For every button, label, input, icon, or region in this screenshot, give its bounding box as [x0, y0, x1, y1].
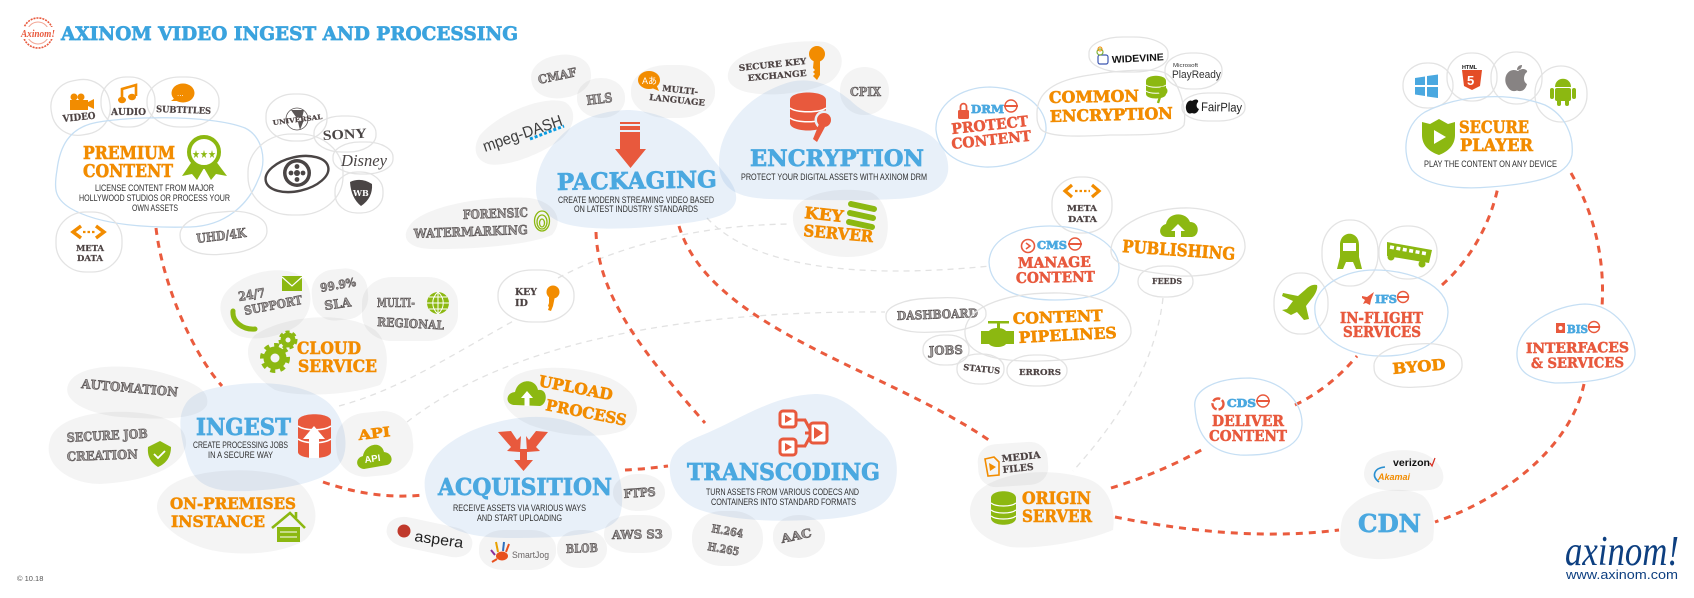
bubble: meta data: [56, 212, 122, 272]
blob: transcoding: [670, 394, 897, 521]
bubble: train: [1322, 220, 1378, 286]
description: acquisition: RECEIVE ASSETS VIA VARIOUS WAYS: [453, 503, 586, 513]
bubble: upload process: UPLOAD: [537, 371, 614, 404]
heading: pipelines: PIPELINES: [1018, 323, 1117, 347]
icon: stamp: [1004, 100, 1018, 112]
bubble: multi-language: MULTI-: [662, 84, 699, 98]
bubble: meta data: DATA: [1068, 215, 1097, 225]
heading: interfaces: INTERFACES: [1526, 340, 1629, 357]
heading: secure: SECURE: [1459, 118, 1529, 138]
bubble: multi-language: [631, 65, 715, 118]
bubble: key server: KEY: [804, 203, 845, 226]
heading: common: COMMON: [1049, 86, 1139, 107]
icon: cms circle: [1022, 240, 1034, 252]
bubble: automation: [67, 366, 207, 419]
description: transcoding: [706, 487, 859, 507]
label: cds: CDS: [1227, 397, 1256, 410]
panel: packaging: [406, 51, 736, 249]
bubble: aac: [773, 515, 825, 558]
bubble: video: [47, 75, 114, 140]
description: packaging: [558, 195, 714, 214]
description: HOLLYWOOD STUDIOS OR PROCESS YOUR: [79, 193, 230, 203]
heading: acquisition: ACQUISITION: [437, 474, 612, 501]
bubble: fairplay: FairPlay: [1201, 100, 1243, 115]
bubble: aws s3: [604, 515, 672, 553]
description: ingest: [193, 440, 288, 460]
bubble: widevine: WIDEVINE: [1112, 52, 1164, 66]
blob: ingest: [180, 383, 346, 491]
blob: origin server: [970, 472, 1114, 548]
icon: small plane: [1362, 292, 1374, 305]
bubble: playready: Microsoft: [1173, 63, 1199, 69]
bubble: multi-regional: MULTI-: [377, 295, 415, 310]
bubble: h.264 h.265: H.264: [710, 522, 745, 541]
url: www.axinom.com: [1565, 567, 1678, 582]
blob: packaging: [536, 110, 736, 229]
bubble: secure key exchange: [728, 41, 842, 94]
outline: secure player: [1406, 97, 1572, 188]
bubble: cmaf: [528, 51, 594, 102]
heading: in-flight: IN-FLIGHT: [1340, 310, 1423, 327]
heading: encryption: ENCRYPTION: [1050, 104, 1173, 126]
bubble: 99.9% sla: 99.9%: [319, 275, 357, 295]
bubble: meta data: META: [1067, 204, 1097, 214]
description: transcoding: TURN ASSETS FROM VARIOUS CODECS AND: [706, 487, 859, 497]
outline: protect content: [936, 87, 1046, 167]
heading: encryption: ENCRYPTION: [750, 146, 924, 172]
bubble: fairplay: [1182, 93, 1245, 121]
bubble: sony: [314, 116, 376, 152]
logo: axinom: [1565, 529, 1679, 582]
heading: server: SERVER: [1022, 507, 1093, 527]
heading: cloud service line 2: SERVICE: [298, 357, 377, 377]
heading: origin: ORIGIN: [1022, 489, 1091, 509]
bubble: 24/7 support: 24/7: [237, 285, 266, 304]
bubble: automation: AUTOMATION: [80, 376, 179, 399]
bubble: html5: HTML: [1462, 65, 1477, 71]
bubble: secure job creation: SECURE JOB: [66, 426, 148, 445]
icon: axinom stamp: [20, 18, 55, 48]
bubble: byod: [1373, 342, 1463, 389]
bubble: ftps: [613, 474, 665, 511]
bubble: media files: MEDIA: [1001, 450, 1042, 465]
icon: refresh: [1212, 398, 1224, 410]
icon: database upload: [298, 414, 331, 458]
bubble: providers: Akamai: [1377, 472, 1410, 483]
bubble: mpeg-dash: [476, 100, 573, 165]
bubble: warner bros: [335, 172, 383, 213]
bubble: playready: [1165, 53, 1222, 89]
panel: acquisition: [384, 368, 672, 570]
bubble: cmaf: CMAF: [537, 65, 578, 87]
description: ingest: IN A SECURE WAY: [208, 450, 273, 460]
bubble: audio: [101, 77, 155, 127]
heading: cdn: CDN: [1358, 509, 1421, 538]
bubble: feeds: [1138, 266, 1193, 297]
title: [20, 18, 518, 48]
icon: axinom stamp: Axinom!: [20, 29, 55, 40]
icon: stamp: [1068, 238, 1082, 250]
panel: premium content: [47, 75, 269, 272]
bubble: mpeg-dash: mpeg-DASH: [481, 113, 565, 156]
icon: converging arrows: [498, 431, 548, 471]
bubble: api: [333, 408, 416, 480]
bubble: upload process: [503, 368, 637, 436]
heading: protect content: PROTECT: [951, 113, 1029, 138]
bubble: on-premises instance: [157, 470, 315, 554]
studios: [248, 94, 393, 215]
icon: down arrow: [615, 122, 646, 168]
bubble: status: STATUS: [963, 363, 1001, 377]
bubble: blob: BLOB: [566, 541, 598, 556]
bubble: publishing: [1111, 208, 1245, 276]
bubble: secure job creation: CREATION: [67, 447, 138, 464]
bubble: media files: FILES: [1002, 462, 1034, 476]
bubble: reel logo: [248, 134, 343, 215]
panel: origin server: [970, 441, 1114, 548]
bubble: errors: ERRORS: [1019, 368, 1061, 378]
bubble: multi-language: LANGUAGE: [649, 93, 706, 109]
bubble: 99.9% sla: SLA: [323, 294, 352, 313]
bubble: apple: [1491, 52, 1542, 104]
icon: stamp: [1397, 292, 1409, 302]
description: LICENSE CONTENT FROM MAJOR: [95, 183, 214, 193]
icon: database key green: [1146, 76, 1168, 103]
bubble: key server: [793, 190, 888, 257]
heading: transcoding: TRANSCODING: [687, 459, 880, 486]
label: drm: DRM: [971, 103, 1004, 116]
bubble: hls: [577, 78, 625, 118]
heading: player: PLAYER: [1460, 136, 1534, 156]
bubble: cpix: CPIX: [850, 85, 882, 99]
bubble: upload process: PROCESS: [544, 395, 628, 430]
outline: content pipelines: [965, 293, 1131, 361]
panel: interfaces and services: [1517, 304, 1635, 383]
bubble: subtitles: [147, 77, 219, 127]
bubble: bus: [1379, 226, 1437, 279]
icon: database key: [790, 92, 834, 142]
bubble: secure key exchange: EXCHANGE: [747, 69, 808, 84]
bubble: h.264 h.265: H.265: [706, 540, 740, 559]
outline: common encryption: [1037, 70, 1185, 136]
bubble: ftps: FTPS: [623, 485, 656, 501]
icon: transcoding: [780, 411, 827, 455]
bubble: providers: verizon: [1393, 458, 1430, 469]
bubble: sony: SONY: [322, 127, 367, 144]
heading: cloud service: CLOUD: [297, 339, 361, 359]
outline: in-flight services: [1315, 270, 1448, 356]
bubble: subtitles: SUBTITLES: [156, 105, 211, 117]
bubble: smartjog: [479, 530, 556, 570]
bubble: blob: [557, 530, 607, 568]
bubble: 24/7 support: [220, 270, 310, 338]
bubble: forensic watermarking: WATERMARKING: [413, 222, 528, 241]
bubble: key id: [498, 270, 574, 322]
heading: services: & SERVICES: [1531, 355, 1624, 372]
bubble: dashboard: [885, 296, 987, 334]
bubble: multi-regional: REGIONAL: [377, 315, 445, 333]
panel: cloud service: [220, 266, 458, 395]
panel: content pipelines: [885, 293, 1131, 386]
panel: deliver content: [1195, 378, 1302, 455]
description: packaging: ON LATEST INDUSTRY STANDARDS: [574, 204, 698, 214]
blob: cdn: [1340, 490, 1434, 559]
bubble: jobs: [923, 335, 969, 365]
heading: deliver: DELIVER: [1212, 413, 1285, 430]
bubble: secure job creation: [49, 412, 186, 484]
bubble: uhd/4k: UHD/4K: [196, 225, 248, 246]
copyright: © 10.18: [17, 574, 43, 583]
label: ifs: IFS: [1375, 293, 1397, 306]
bubble: multi-language: Aあ: [642, 76, 657, 86]
bubble: status: [957, 354, 1004, 384]
heading: protect content line 2: CONTENT: [951, 128, 1032, 153]
bubble: errors: [1007, 355, 1067, 386]
bubble: aws s3: AWS S3: [611, 527, 663, 542]
description: OWN ASSETS: [132, 203, 178, 213]
description: packaging: CREATE MODERN STREAMING VIDEO BASED: [558, 195, 714, 205]
bubble: html5: 5: [1467, 73, 1474, 88]
bubble: 99.9% sla: [309, 266, 370, 323]
icon: bis chip: [1556, 323, 1565, 333]
panel: ingest: [49, 366, 416, 554]
icon: gears: [262, 332, 296, 371]
bubble: 24/7 support: SUPPORT: [243, 293, 304, 318]
icon: stamp: [1588, 322, 1600, 332]
heading: services: SERVICES: [1343, 324, 1421, 341]
bubble: aspera: [384, 513, 475, 561]
description: [79, 183, 230, 213]
panel: secure player: [1403, 52, 1587, 188]
bubble: api: API: [356, 424, 391, 444]
bubble: universal: [266, 94, 327, 141]
bubble: hls: HLS: [586, 91, 613, 109]
outline: manage content: [989, 226, 1119, 300]
panel: cdn: [1340, 450, 1443, 559]
bubble: meta data: [1052, 177, 1112, 233]
description: encryption: PROTECT YOUR DIGITAL ASSETS WITH AXINOM DRM: [741, 172, 927, 182]
bubble: smartjog: SmartJog: [512, 550, 549, 560]
bubble: video: VIDEO: [61, 111, 96, 125]
heading: content: CONTENT: [1012, 306, 1104, 328]
description: secure player: PLAY THE CONTENT ON ANY DEVICE: [1424, 159, 1557, 169]
bubble: key id: ID: [515, 298, 528, 309]
heading: manage: MANAGE: [1018, 254, 1091, 272]
bubble: secure key exchange: SECURE KEY: [738, 57, 808, 74]
bubble: media files: [977, 441, 1049, 488]
description: acquisition: [453, 503, 586, 523]
label: cms: CMS: [1037, 239, 1067, 252]
panel: common encryption: [1037, 37, 1245, 136]
bubble: uhd/4k: [178, 208, 269, 258]
bubble: audio: AUDIO: [110, 107, 146, 118]
bubble: key server: SERVER: [803, 221, 875, 246]
heading: content: CONTENT: [1016, 269, 1095, 287]
panel: protect content: [936, 87, 1046, 167]
bubble: meta data: META: [76, 244, 104, 254]
outline: interfaces and services: [1517, 304, 1635, 383]
icon: award: [182, 137, 227, 180]
bubble: disney: Disney: [340, 151, 387, 170]
connectors: grey dashed links: [339, 218, 1163, 471]
bubble: cpix: [840, 67, 889, 115]
panel: encryption: [498, 41, 948, 322]
bubble: android: [1535, 66, 1587, 122]
connectors: red dashed main flow: [156, 173, 1603, 534]
bubble: windows: [1403, 63, 1453, 108]
icon: lock: [958, 104, 969, 119]
heading: ingest: INGEST: [196, 414, 291, 441]
icon: database green: [991, 491, 1016, 525]
bubble: on-premises instance: INSTANCE: [171, 512, 265, 531]
panel: manage content: [989, 177, 1245, 300]
bubble: h.264 h.265: [692, 511, 763, 566]
bubble: multi-regional: [362, 277, 458, 341]
bubble: widevine: [1089, 37, 1168, 72]
bubble: api: API: [364, 453, 381, 466]
bubble: playready: PlayReady: [1172, 69, 1221, 81]
icon: valve: [981, 321, 1014, 347]
heading: AXINOM VIDEO INGEST AND PROCESSING: [60, 23, 518, 45]
bubble: forensic watermarking: [406, 197, 558, 249]
bubble: warner bros: WB: [352, 188, 369, 198]
bubble: feeds: FEEDS: [1152, 276, 1182, 286]
blob: cloud service: [248, 317, 387, 395]
bubble: key id: KEY: [515, 287, 537, 298]
description: acquisition: AND START UPLOADING: [477, 513, 562, 523]
heading: packaging: PACKAGING: [557, 166, 717, 196]
bubble: jobs: JOBS: [928, 343, 963, 358]
bubble: aac: AAC: [779, 526, 813, 546]
bubble: subtitles: ...: [177, 89, 184, 98]
bubble: providers: [1364, 450, 1443, 491]
icon: award: ★★★: [192, 148, 216, 161]
bubble: on-premises instance: ON-PREMISES: [170, 494, 296, 513]
heading: premium content: PREMIUM: [83, 144, 175, 164]
bubble: aspera: aspera: [413, 528, 465, 552]
bubble: plane: [1274, 273, 1328, 334]
bubble: forensic watermarking: FORENSIC: [463, 205, 528, 222]
icon: shield play: [1422, 119, 1455, 155]
bubble: meta data: DATA: [77, 254, 103, 264]
panel: in-flight services: [1274, 220, 1463, 389]
outline: deliver content: [1195, 378, 1302, 455]
bubble: publishing: PUBLISHING: [1122, 237, 1236, 265]
description: ingest: CREATE PROCESSING JOBS: [193, 440, 288, 450]
panel: transcoding: [670, 394, 897, 566]
bubble: byod: BYOD: [1392, 355, 1446, 378]
blob: encryption: [719, 80, 948, 200]
bubble: disney: [333, 142, 393, 174]
description: transcoding: CONTAINERS INTO STANDARD FORMATS: [711, 497, 856, 507]
outline: premium content: [55, 118, 263, 227]
bubble: dashboard: DASHBOARD: [897, 306, 978, 323]
blob: acquisition: [425, 417, 622, 538]
label: bis: BIS: [1567, 323, 1588, 336]
icon: stamp: [1256, 395, 1270, 407]
heading: content: CONTENT: [1209, 428, 1287, 445]
bubble: universal: UNIVERSAL: [272, 113, 323, 127]
heading: premium content line 2: CONTENT: [83, 162, 173, 182]
bubble: html5: [1447, 53, 1497, 101]
